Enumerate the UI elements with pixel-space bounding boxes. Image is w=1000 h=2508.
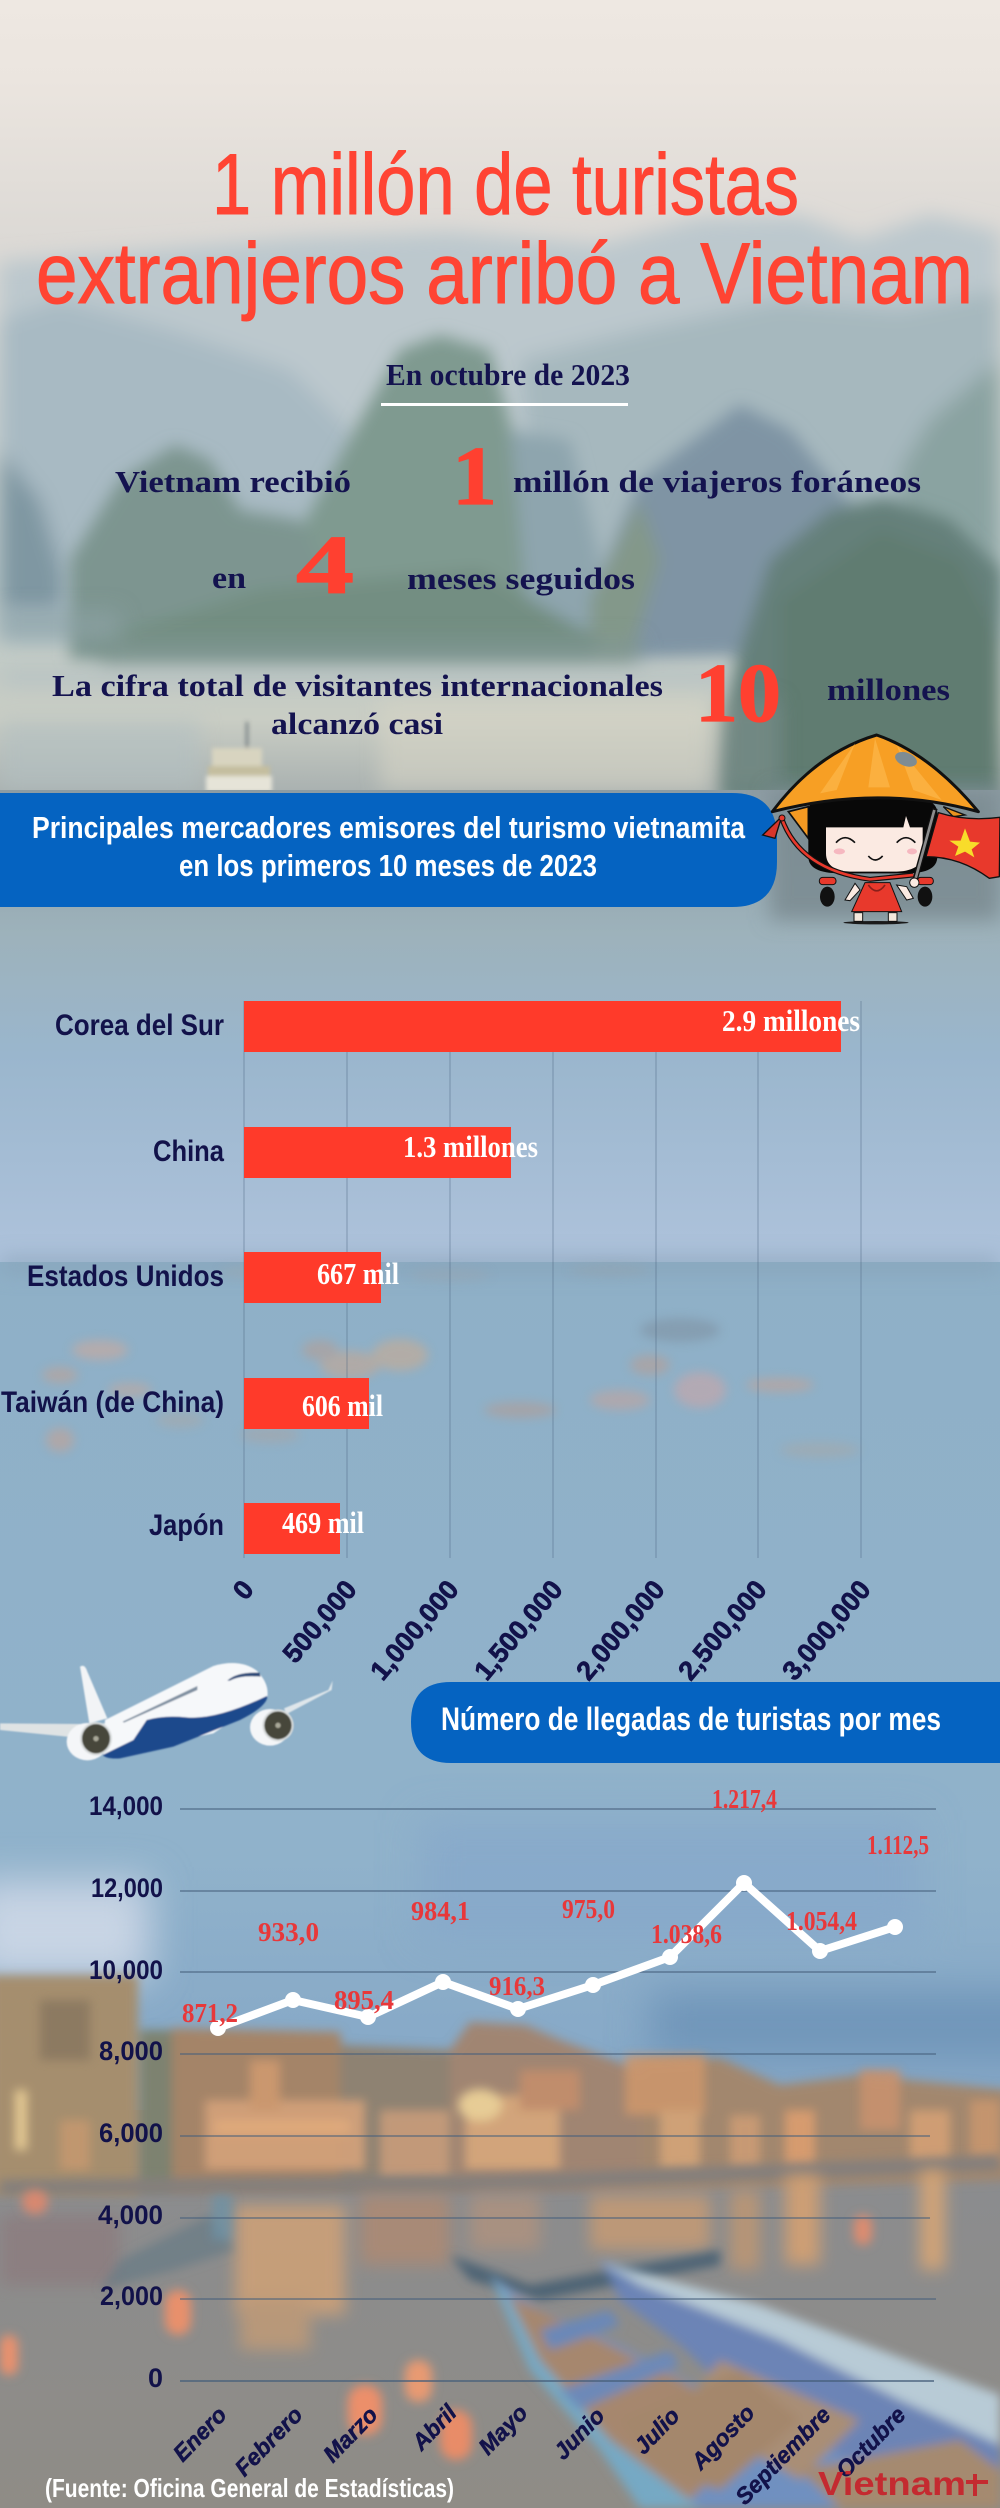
source note: (Fuente: Oficina General de Estadísticas) (45, 2473, 454, 2503)
x axis labels: 0 (227, 1575, 260, 1605)
text block: ten million total: 10 (695, 647, 781, 740)
month labels: Septiembre (730, 2401, 836, 2508)
category labels: Taiwán (de China) (1, 1386, 224, 1419)
icon: tourist boat (206, 722, 272, 792)
x axis labels: 2,500,000 (672, 1575, 773, 1686)
data labels: 916,3 (489, 1971, 545, 2001)
y axis labels: 12,000 (91, 1873, 163, 1903)
title (36, 137, 973, 322)
month labels: Julio (629, 2402, 685, 2459)
text block: ten million total: alcanzó casi (271, 706, 443, 741)
heading pill: main source markets: Principales mercadores emisores del turismo vietnamita (32, 810, 746, 845)
data labels (182, 1784, 929, 2028)
data labels: 933,0 (258, 1917, 319, 1947)
value labels: 469 mil (282, 1505, 364, 1540)
category labels (1, 1009, 224, 1542)
title: 1 millón de turistas (212, 137, 799, 233)
value labels: 2.9 millones (722, 1003, 860, 1038)
month labels: Marzo (318, 2401, 383, 2467)
x axis labels: 2,000,000 (570, 1575, 671, 1686)
data labels: 895,4 (334, 1985, 394, 2015)
x axis labels (227, 1575, 877, 1686)
value labels (282, 1003, 860, 1540)
y axis labels: 14,000 (89, 1791, 163, 1821)
logo: Vietnam+: Vietnam (818, 2465, 966, 2502)
text block: monthly figure (115, 430, 921, 523)
line chart: monthly arrivals (89, 1784, 936, 2508)
data labels: 1.217,4 (712, 1784, 777, 1814)
x axis labels: 500,000 (277, 1575, 363, 1669)
text block: consecutive months: en (212, 560, 246, 595)
gridlines (244, 1001, 861, 1558)
text block: consecutive months: meses seguidos (407, 561, 635, 596)
month labels: Octubre (831, 2401, 911, 2483)
subtitle: En octubre de 2023 (381, 357, 630, 406)
category labels: China (153, 1135, 224, 1168)
heading pill: main source markets (0, 793, 777, 907)
background: Ha Long Bay karst landscape (0, 0, 1000, 800)
background: blurred sky and sea (0, 790, 1000, 2112)
text block: ten million total: La cifra total de visitantes internacionales (52, 668, 663, 703)
icon: mascot girl with conical hat and Vietnamese flag (763, 735, 1000, 924)
y axis labels: 0 (148, 2363, 163, 2393)
category labels: Corea del Sur (55, 1009, 224, 1042)
y axis labels: 8,000 (99, 2036, 163, 2066)
bars (244, 1001, 841, 1554)
month labels: Mayo (473, 2399, 533, 2460)
text block: monthly figure: millón de viajeros foráneos (513, 464, 921, 499)
month labels (168, 2399, 911, 2508)
category labels: Japón (149, 1509, 224, 1542)
value labels: 1.3 millones (403, 1129, 538, 1164)
heading pill: main source markets: en los primeros 10 meses de 2023 (179, 848, 597, 883)
heading pill: monthly arrivals (411, 1682, 1000, 1763)
text block: monthly figure: Vietnam recibió (115, 464, 351, 499)
y axis labels: 2,000 (100, 2281, 163, 2311)
x axis labels: 3,000,000 (776, 1575, 877, 1686)
category labels: Estados Unidos (27, 1260, 224, 1293)
gridlines (180, 1809, 936, 2381)
month labels: Enero (168, 2401, 232, 2466)
data labels: 975,0 (562, 1894, 615, 1924)
month labels: Junio (548, 2402, 610, 2465)
data line (210, 1875, 903, 2036)
text block: consecutive months (212, 519, 635, 612)
bar chart: top source markets (1, 1001, 877, 1686)
x axis labels: 1,000,000 (364, 1575, 465, 1686)
value labels: 667 mil (317, 1256, 399, 1291)
data labels: 984,1 (411, 1896, 470, 1926)
icon: airplane (0, 1663, 333, 1760)
data labels: 1.054,4 (786, 1906, 857, 1936)
y axis labels: 4,000 (98, 2200, 163, 2230)
subtitle: En octubre de 2023: En octubre de 2023 (386, 357, 630, 392)
background: Hoi An old town and river (0, 1975, 1000, 2508)
x axis labels: 1,500,000 (468, 1575, 569, 1686)
text block: consecutive months: 4 (296, 519, 354, 612)
data labels: 871,2 (182, 1998, 238, 2028)
y axis labels: 6,000 (99, 2118, 163, 2148)
month labels: Abril (406, 2399, 462, 2456)
y axis labels: 10,000 (89, 1955, 163, 1985)
text block: ten million total (52, 647, 950, 741)
y axis labels (89, 1791, 163, 2393)
text block: ten million total: millones (827, 672, 950, 707)
month labels: Febrero (229, 2401, 308, 2481)
text block: monthly figure: 1 (452, 430, 497, 523)
data labels: 1.038,6 (651, 1919, 722, 1949)
data labels: 1.112,5 (867, 1830, 929, 1860)
value labels: 606 mil (302, 1388, 383, 1423)
month labels: Agosto (685, 2399, 760, 2475)
